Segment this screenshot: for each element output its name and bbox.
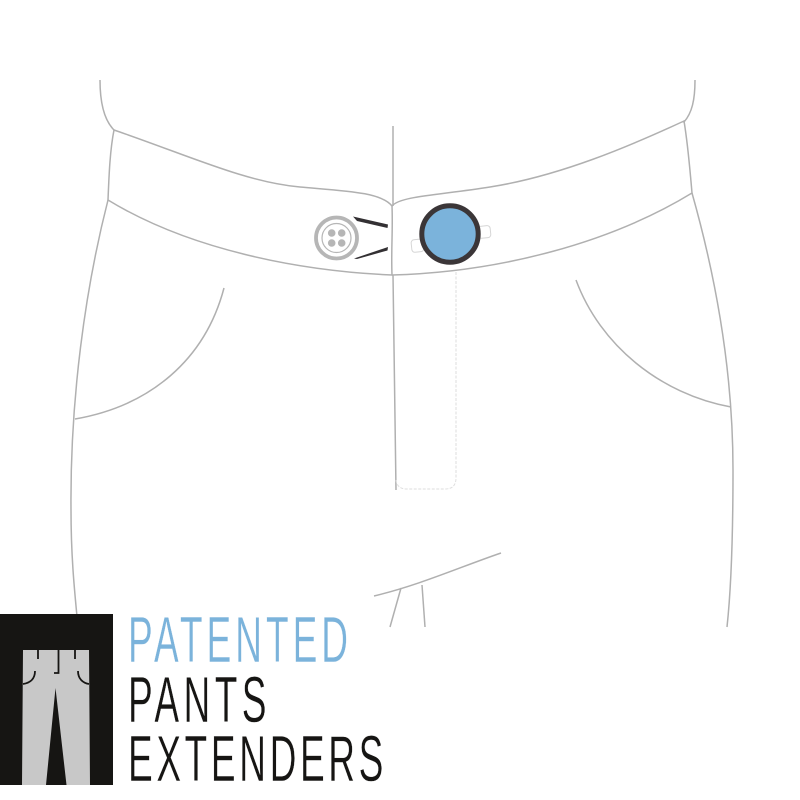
- right tab: [477, 225, 491, 239]
- PANTS: PANTS: [128, 664, 267, 737]
- logo heading: [128, 604, 383, 796]
- pants line drawing: [71, 80, 733, 627]
- logo: pants icon: [0, 614, 113, 785]
- blue circle: [422, 206, 478, 262]
- waistband right half: [392, 121, 692, 275]
- fly stitching: [396, 272, 456, 489]
- black panel: [0, 614, 113, 785]
- icon: shirt button: [316, 218, 357, 258]
- inner left leg: [390, 588, 401, 627]
- centre fly seam: [393, 126, 396, 490]
- right leg outer seam: [692, 193, 733, 627]
- upper elastic: [353, 216, 388, 228]
- waistband left half: [108, 130, 392, 275]
- inner right leg: [422, 585, 425, 627]
- pants details: [23, 650, 89, 684]
- grey pants: [22, 650, 90, 785]
- left torso edge: [100, 80, 114, 130]
- lower elastic: [354, 247, 388, 259]
- right pocket: [576, 280, 731, 407]
- EXTENDERS: EXTENDERS: [128, 723, 383, 796]
- left tab: [411, 239, 424, 253]
- elastic bands: [353, 216, 388, 259]
- right torso edge: [684, 80, 695, 122]
- left pocket: [75, 288, 224, 419]
- PATENTED: PATENTED: [128, 604, 348, 677]
- left leg outer seam: [71, 200, 108, 627]
- crotch seam: [374, 553, 501, 596]
- highlighted button with tabs: [411, 206, 491, 262]
